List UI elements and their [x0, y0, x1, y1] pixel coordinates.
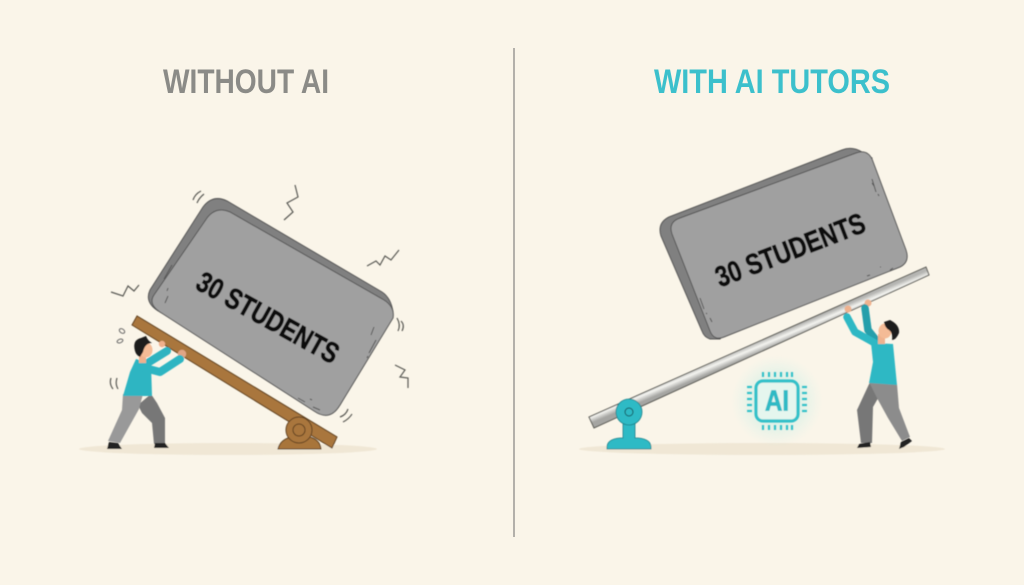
panel: without AI: [79, 185, 408, 455]
pivot stand right: [607, 399, 651, 449]
divider: [513, 48, 515, 537]
wooden plank: [132, 316, 337, 448]
strain squiggles: [110, 185, 408, 422]
character: strained man: [107, 336, 186, 449]
title: with AI tutors: WITH AI TUTORS: [654, 63, 890, 101]
heavy block left: [148, 199, 393, 415]
sweat drops: [117, 328, 126, 344]
ground shadow right: [579, 443, 945, 455]
panel: with AI tutors: [579, 148, 945, 455]
icon: AI chip: AI: [765, 386, 789, 418]
pivot wheel left: [286, 417, 312, 443]
ground shadow left: [79, 443, 377, 455]
pivot base left: [278, 437, 321, 449]
character: relaxed man: [844, 300, 912, 449]
heavy block right: [660, 148, 907, 339]
title: without AI: WITHOUT AI: [163, 63, 329, 101]
icon: AI chip: [731, 355, 823, 447]
block label: 30 STUDENTS: [711, 208, 870, 294]
block label: 30 STUDENTS: [191, 266, 344, 371]
steel beam: [589, 267, 929, 428]
